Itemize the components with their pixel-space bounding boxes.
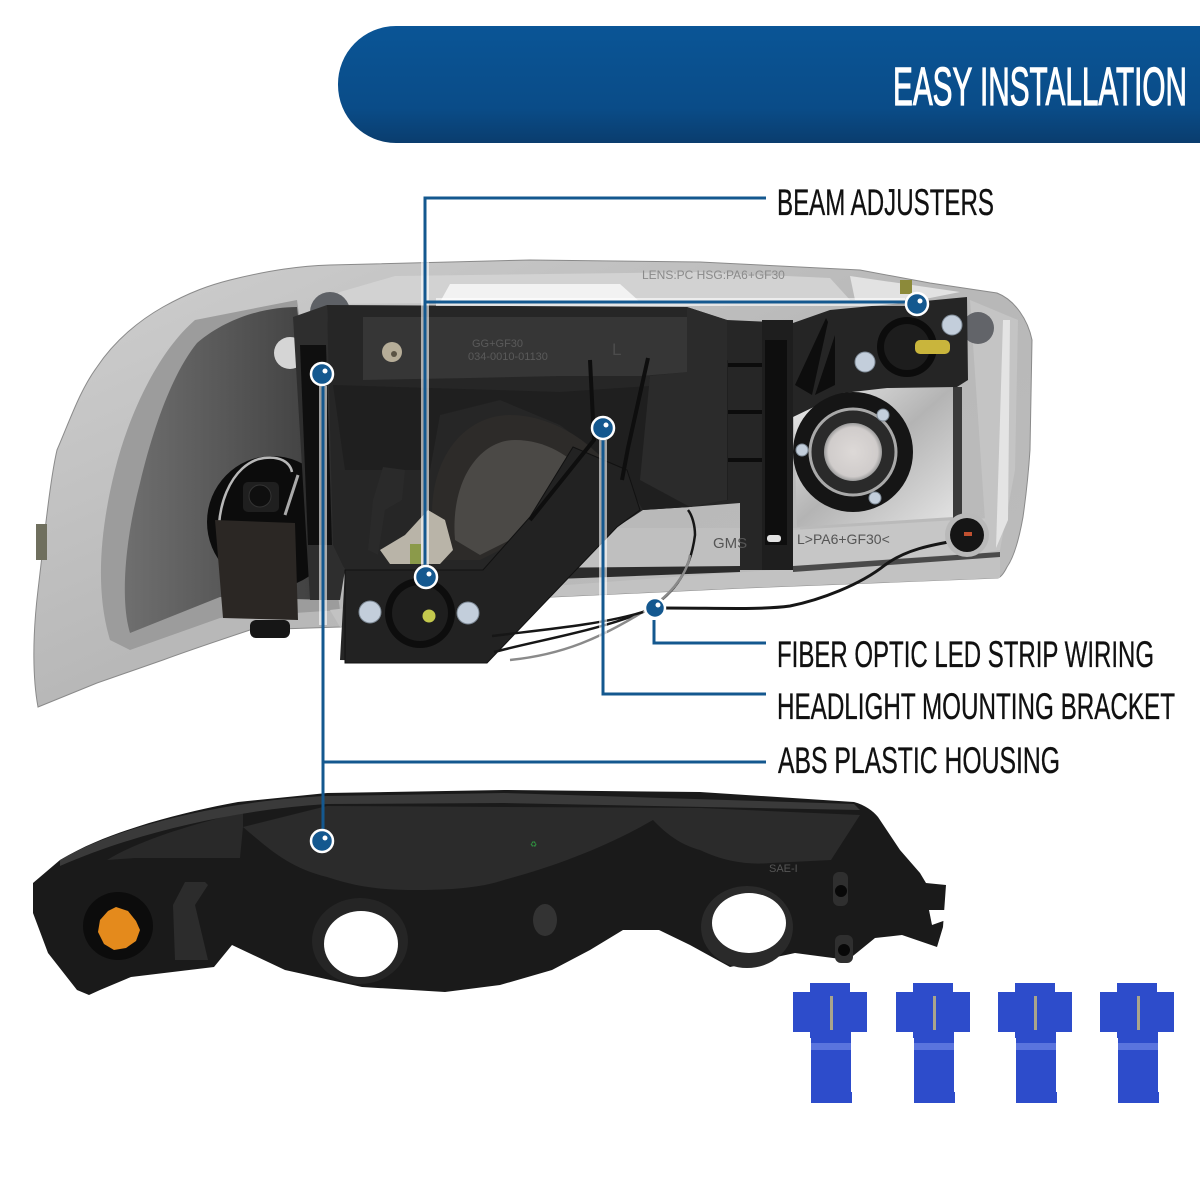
- central dome: [432, 415, 612, 560]
- lower chrome bands: [330, 555, 1000, 627]
- reflector outer band: [101, 300, 340, 650]
- connector 3: [998, 983, 1072, 1103]
- headlight assembly: [34, 260, 1032, 707]
- upper housing panel: [243, 806, 860, 890]
- headlight assembly: L>PA6+GF30<: [797, 531, 890, 547]
- connector 4: [1100, 983, 1174, 1103]
- ballast box: [215, 520, 298, 620]
- bracket side strip: [293, 305, 345, 600]
- callout: fiber optic wiring: [645, 598, 1154, 675]
- callout: abs plastic housing: [311, 363, 1060, 852]
- reflector interior: [125, 307, 330, 633]
- molded part numbers: GG+GF30: [472, 338, 523, 350]
- beam lens socket: [793, 392, 913, 512]
- molded chrome text: GMS: [713, 535, 747, 552]
- header banner: [338, 26, 1200, 143]
- turn signal housing: ♻: [530, 840, 537, 849]
- upper screws: [855, 315, 962, 372]
- upper label panel: [363, 317, 690, 380]
- headlight assembly: LENS:PC HSG:PA6+GF30: [642, 268, 785, 282]
- callout: beam adjusters: [415, 182, 994, 588]
- ballast wire dome: [207, 456, 337, 588]
- lower bulb socket: [385, 578, 455, 648]
- main black bracket: [327, 305, 793, 663]
- connector 2: [896, 983, 970, 1103]
- diagonal bracket arm: [345, 447, 640, 663]
- plug: [533, 904, 557, 936]
- lower screws: [359, 601, 479, 624]
- wiring: [492, 510, 960, 660]
- label: BEAM ADJUSTERS: [777, 182, 994, 223]
- chrome housing: [34, 260, 1032, 707]
- bulb clip: [173, 882, 208, 960]
- wire grommet: [945, 513, 989, 557]
- vertical rib: [762, 320, 793, 570]
- blue wire connectors: [793, 983, 1174, 1103]
- right socket hole: [701, 886, 793, 968]
- housing clip tab: [36, 524, 47, 560]
- headlight assembly: 034-0010-01130: [468, 351, 548, 363]
- left socket hole: [312, 898, 408, 984]
- amber bulb: [83, 892, 153, 960]
- upper bulb socket: [877, 280, 950, 377]
- callout: mounting bracket: [592, 417, 1175, 727]
- silver bulb mount: [380, 510, 453, 564]
- left bracket hook: [368, 467, 405, 555]
- right inner chrome frame: [970, 300, 1018, 555]
- connector 1: [793, 983, 867, 1103]
- end tab notch: [929, 910, 946, 925]
- upper chrome reflections: [320, 272, 850, 304]
- mounting studs: [833, 872, 853, 963]
- label: ABS PLASTIC HOUSING: [778, 740, 1060, 781]
- turn signal housing: [33, 790, 946, 995]
- headlight assembly: L: [612, 340, 621, 359]
- chrome around lens: [793, 387, 953, 527]
- upper right bracket plate: [793, 297, 968, 417]
- part marks: SAE-I: [769, 863, 798, 875]
- grommets: [310, 292, 350, 332]
